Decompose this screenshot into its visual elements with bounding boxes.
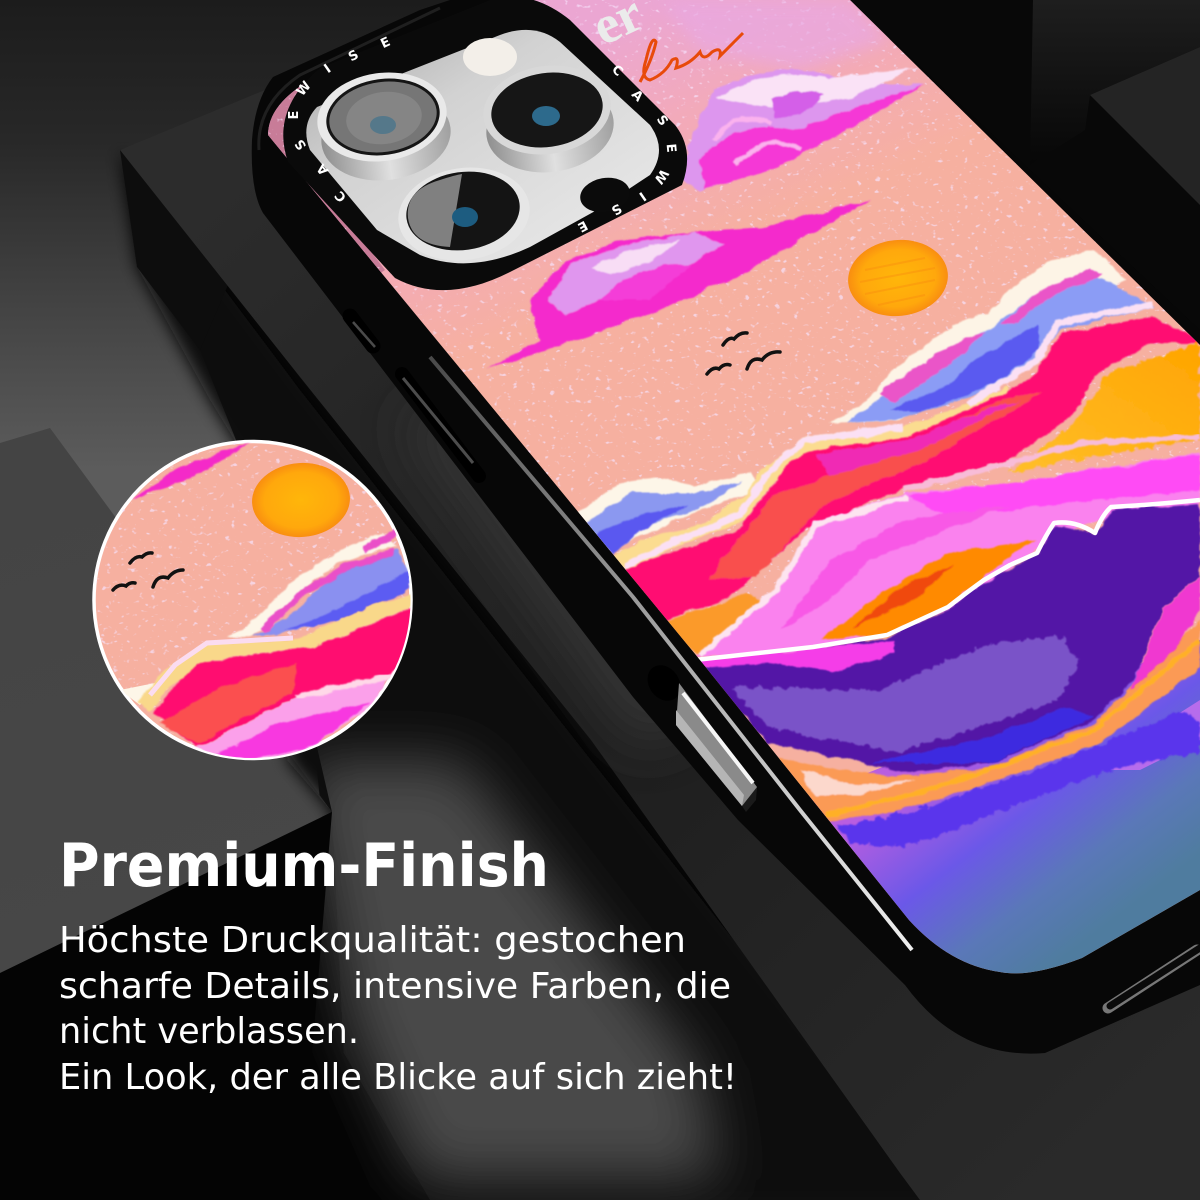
headline: Premium-Finish xyxy=(59,831,549,901)
art: pale outline of pink mountain xyxy=(700,497,907,655)
CASEWISE lettering: S xyxy=(346,48,361,65)
art: purple mountain xyxy=(701,503,1200,773)
body copy: Ein Look, der alle Blicke auf sich zieht! xyxy=(59,1057,737,1098)
detail: darker blue stroke xyxy=(285,570,410,632)
detail: pale outline xyxy=(150,638,293,695)
camera glass xyxy=(306,30,659,263)
art: white wavy ridge line xyxy=(695,500,1200,660)
lens: telephoto xyxy=(392,159,536,269)
camera module xyxy=(283,0,687,290)
detail: white ridge xyxy=(228,533,397,638)
flash xyxy=(463,38,517,76)
detail: magenta cloud stroke xyxy=(133,443,250,500)
CASEWISE lettering: E xyxy=(663,143,678,153)
corner bevel xyxy=(259,8,440,150)
art script lettering at top xyxy=(583,0,743,82)
art: left ridge blue xyxy=(584,481,742,556)
CASEWISE lettering: E xyxy=(575,217,590,234)
CASEWISE lettering: E xyxy=(287,111,302,119)
detail: pink ridge strokes xyxy=(262,533,395,630)
CASEWISE lettering: C xyxy=(608,62,626,80)
art: left ridge white xyxy=(578,472,756,551)
art: magenta right wedge xyxy=(1131,577,1200,690)
art: pink mountain xyxy=(695,453,1200,657)
phone artwork xyxy=(250,0,1200,1000)
camera ring xyxy=(283,0,687,290)
detail: sun xyxy=(252,462,350,538)
CASEWISE lettering: I xyxy=(636,188,648,203)
lens: ultra wide xyxy=(312,64,456,189)
art: magenta wedge under ridge xyxy=(694,640,894,672)
body copy xyxy=(59,920,737,1098)
phone case body xyxy=(252,0,1200,1054)
CASEWISE lettering: S xyxy=(608,200,624,218)
art: birds xyxy=(707,333,780,374)
art: sun xyxy=(848,240,948,316)
CASEWISE lettering: W xyxy=(294,79,315,99)
CASEWISE lettering: E xyxy=(378,35,393,52)
body copy: scharfe Details, intensive Farben, die xyxy=(59,966,731,1007)
art: blue crayon strokes over sky xyxy=(838,710,1200,847)
button: action xyxy=(350,316,375,347)
art: cream yellow band xyxy=(613,385,1010,572)
art: lower cloud xyxy=(488,200,870,368)
detail: orange red patch xyxy=(160,663,297,743)
glossy edge highlight xyxy=(430,357,912,950)
art: blue strokes in purple xyxy=(872,707,1094,763)
body copy: Höchste Druckqualität: gestochen xyxy=(59,920,686,961)
lens: main xyxy=(477,58,620,180)
art: pink rim sliver xyxy=(268,84,385,272)
CASEWISE lettering: C xyxy=(332,188,350,205)
detail: red mountain xyxy=(153,608,412,747)
art: sky gradient at foot xyxy=(800,640,1200,1000)
detail: magenta lower layer xyxy=(217,703,370,760)
detail: pale stroke xyxy=(297,676,390,697)
art: pale paper specks xyxy=(250,0,1200,700)
button: silver side key xyxy=(641,659,757,812)
CASEWISE lettering: A xyxy=(628,87,646,105)
microphone hole xyxy=(577,174,633,216)
art: orange yellow patch xyxy=(1009,343,1200,473)
detail: birds xyxy=(113,553,183,590)
art: lavender brush patch xyxy=(731,637,1079,753)
art: peach lower band xyxy=(779,620,1200,822)
art: top lavender wash xyxy=(660,0,890,70)
CASEWISE lettering: A xyxy=(314,160,332,178)
body copy: nicht verblassen. xyxy=(59,1011,359,1052)
detail: paper specks xyxy=(90,440,415,760)
art: upper ridge blue xyxy=(846,268,1154,423)
art: red pink mountain xyxy=(621,317,1200,622)
CASEWISE lettering: I xyxy=(322,62,334,77)
CASEWISE lettering: S xyxy=(653,113,671,129)
art: inner orange xyxy=(821,540,1037,638)
speaker slot xyxy=(1108,948,1200,1008)
CASEWISE lettering xyxy=(287,35,678,234)
art: upper cloud xyxy=(680,68,925,192)
art: pale ridge stroke xyxy=(625,305,1152,565)
CASEWISE lettering: W xyxy=(651,166,671,186)
detail: left small ridge xyxy=(120,682,160,705)
art: thin pale stroke xyxy=(903,437,1200,490)
zoom detail circle xyxy=(90,440,415,760)
button: volume xyxy=(402,374,479,476)
detail: blue ridge xyxy=(253,550,412,637)
detail: pink lower layer xyxy=(197,675,390,760)
CASEWISE lettering: S xyxy=(292,136,310,152)
art: upper ridge white xyxy=(829,250,1125,423)
art: orange wedge lower left xyxy=(658,595,760,655)
detail: pale yellow band xyxy=(137,595,412,713)
